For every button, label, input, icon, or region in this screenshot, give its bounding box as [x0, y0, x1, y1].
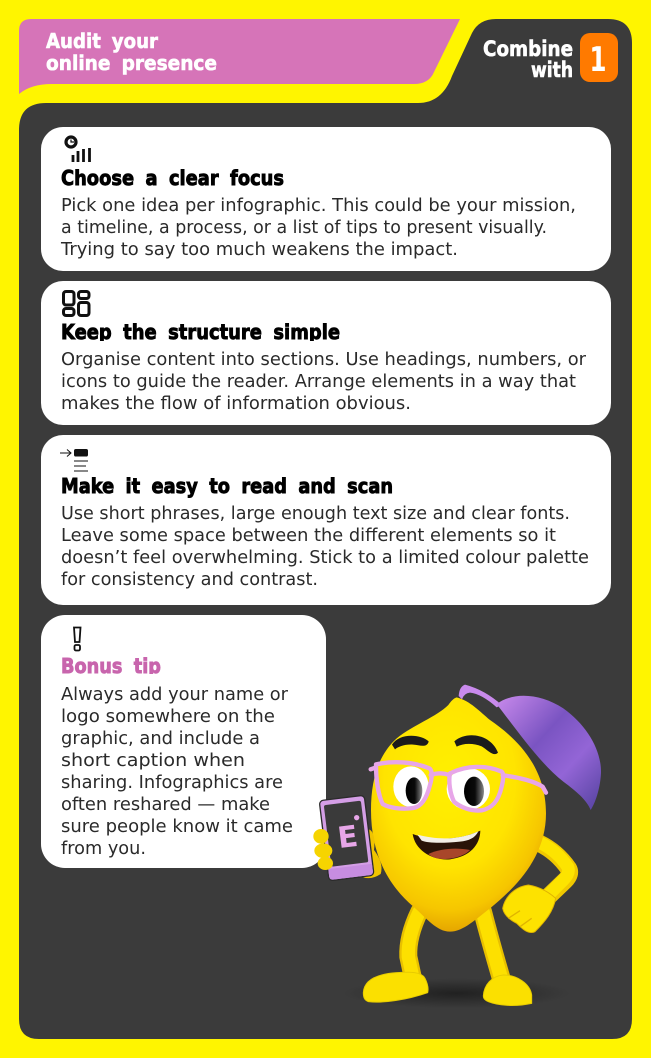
- panel: bonus tip: [41, 615, 326, 868]
- body text: Use short phrases, large enough text size and clear fonts.: [61, 504, 570, 524]
- right shoe: [483, 975, 532, 1005]
- arm on hip: [539, 842, 569, 897]
- icon: exclamation mark: [74, 628, 80, 650]
- body text: Pick one idea per infographic. This could be your mission,: [61, 196, 576, 216]
- leaf: [459, 685, 601, 810]
- banner title: online presence: [46, 51, 217, 75]
- number badge: [580, 33, 618, 82]
- body text: sharing. Infographics are: [61, 773, 283, 793]
- body text: graphic, and include a: [61, 729, 260, 749]
- heading: Choose a clear focus: [61, 166, 284, 190]
- body text: Organise content into sections. Use headings, numbers, or: [61, 350, 587, 370]
- panel: make it easy to read and scan: [41, 435, 611, 605]
- panel: keep the structure simple: [41, 281, 611, 425]
- combine with label: with: [531, 58, 573, 82]
- icon: layout grid: [64, 292, 89, 316]
- heading: Bonus tip: [61, 654, 161, 678]
- ground shadow: [343, 978, 570, 1008]
- left shoe: [363, 972, 428, 1002]
- eyebrows: [392, 735, 498, 754]
- left leg: [408, 912, 419, 980]
- fist: [503, 885, 556, 933]
- body text: logo somewhere on the: [61, 707, 275, 727]
- banner title: Audit your: [46, 29, 158, 53]
- leaf stem: [459, 685, 502, 707]
- body text: sure people know it came: [61, 817, 293, 837]
- body text: [61, 685, 293, 859]
- body text: makes the flow of information obvious.: [61, 394, 411, 414]
- icon: arrow to text block: [60, 449, 88, 471]
- body text: Always add your name or: [61, 685, 289, 705]
- body text: often reshared — make: [61, 795, 270, 815]
- body text: icons to guide the reader. Arrange elements in a way that: [61, 372, 576, 392]
- phone and hand: [313, 795, 381, 881]
- phone and hand: E: [336, 819, 360, 855]
- icon: pie and bars: [66, 137, 90, 162]
- mouth: [413, 831, 480, 859]
- illustration: lemon mascot: [313, 685, 601, 1008]
- header banner: [19, 19, 460, 94]
- heading: Make it easy to read and scan: [61, 474, 393, 498]
- leaf blade: [497, 696, 601, 810]
- banner title: [46, 29, 217, 75]
- panel: choose a clear focus: [41, 127, 611, 271]
- body text: doesn’t feel overwhelming. Stick to a limited colour palette: [61, 548, 589, 568]
- body text: from you.: [61, 839, 146, 859]
- body text: [61, 350, 587, 414]
- body text: [61, 504, 589, 590]
- right leg: [483, 912, 502, 980]
- banner shape: [19, 19, 460, 94]
- body text: a timeline, a process, or a list of tips to present visually.: [61, 218, 547, 238]
- lemon body: [371, 697, 546, 932]
- eyes: [393, 766, 490, 810]
- combine with label: Combine: [483, 37, 573, 61]
- glasses: [371, 762, 546, 811]
- body text: for consistency and contrast.: [61, 570, 318, 590]
- number badge: 1: [590, 40, 606, 80]
- body text: [60, 196, 576, 260]
- heading: Keep the structure simple: [61, 320, 340, 344]
- body text: Trying to say too much weakens the impact.: [60, 240, 458, 260]
- body text: Leave some space between the different elements so it: [61, 526, 556, 546]
- body text: short caption when: [61, 751, 245, 771]
- combine with label: [483, 37, 573, 82]
